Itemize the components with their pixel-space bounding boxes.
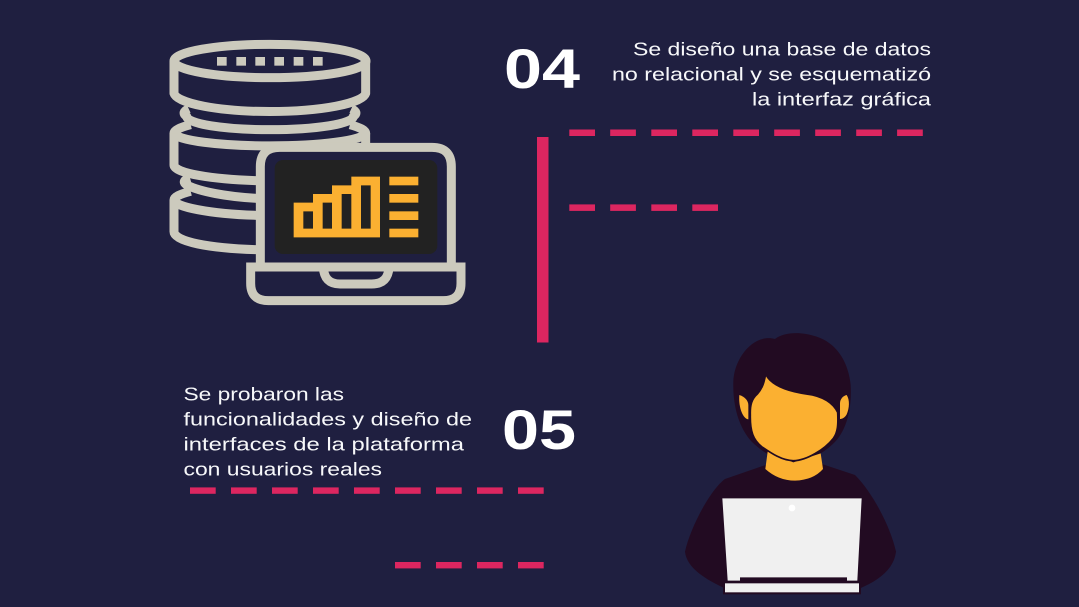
number 05: 05 [502, 398, 576, 461]
hair [733, 333, 851, 462]
text block: step 05: funcionalidades y diseño de [184, 408, 472, 430]
text block: step 04: la interfaz gráfica [752, 88, 932, 110]
text block: step 05: con usuarios reales [184, 458, 382, 480]
text block: step 04: no relacional y se esquematizó [612, 64, 931, 84]
dashed lines: step 05 [190, 487, 544, 568]
laptop base [251, 267, 461, 301]
number 04: 04 [504, 37, 580, 100]
bar chart [294, 177, 380, 237]
right ear [840, 395, 849, 419]
text block: step 05 [184, 384, 472, 480]
shirt [685, 464, 896, 588]
left ear [739, 395, 748, 419]
list lines [389, 177, 418, 237]
database stack [174, 44, 366, 250]
face [750, 374, 838, 461]
database dots [217, 57, 323, 66]
laptop base [724, 582, 860, 593]
text block: step 05: Se probaron las [184, 384, 344, 404]
text block: step 04 [612, 38, 932, 110]
neck [765, 452, 823, 481]
timeline connector: step 04 [537, 130, 923, 342]
text block: step 04: Se diseño una base de datos [633, 38, 931, 60]
text block: step 05: interfaces de la plataforma [184, 434, 465, 454]
laptop screen frame [260, 147, 451, 267]
laptop display [275, 160, 437, 254]
icon: database with laptop [174, 44, 461, 301]
illustration: person with laptop [685, 333, 896, 593]
laptop lid [722, 498, 862, 581]
laptop logo [789, 505, 795, 511]
